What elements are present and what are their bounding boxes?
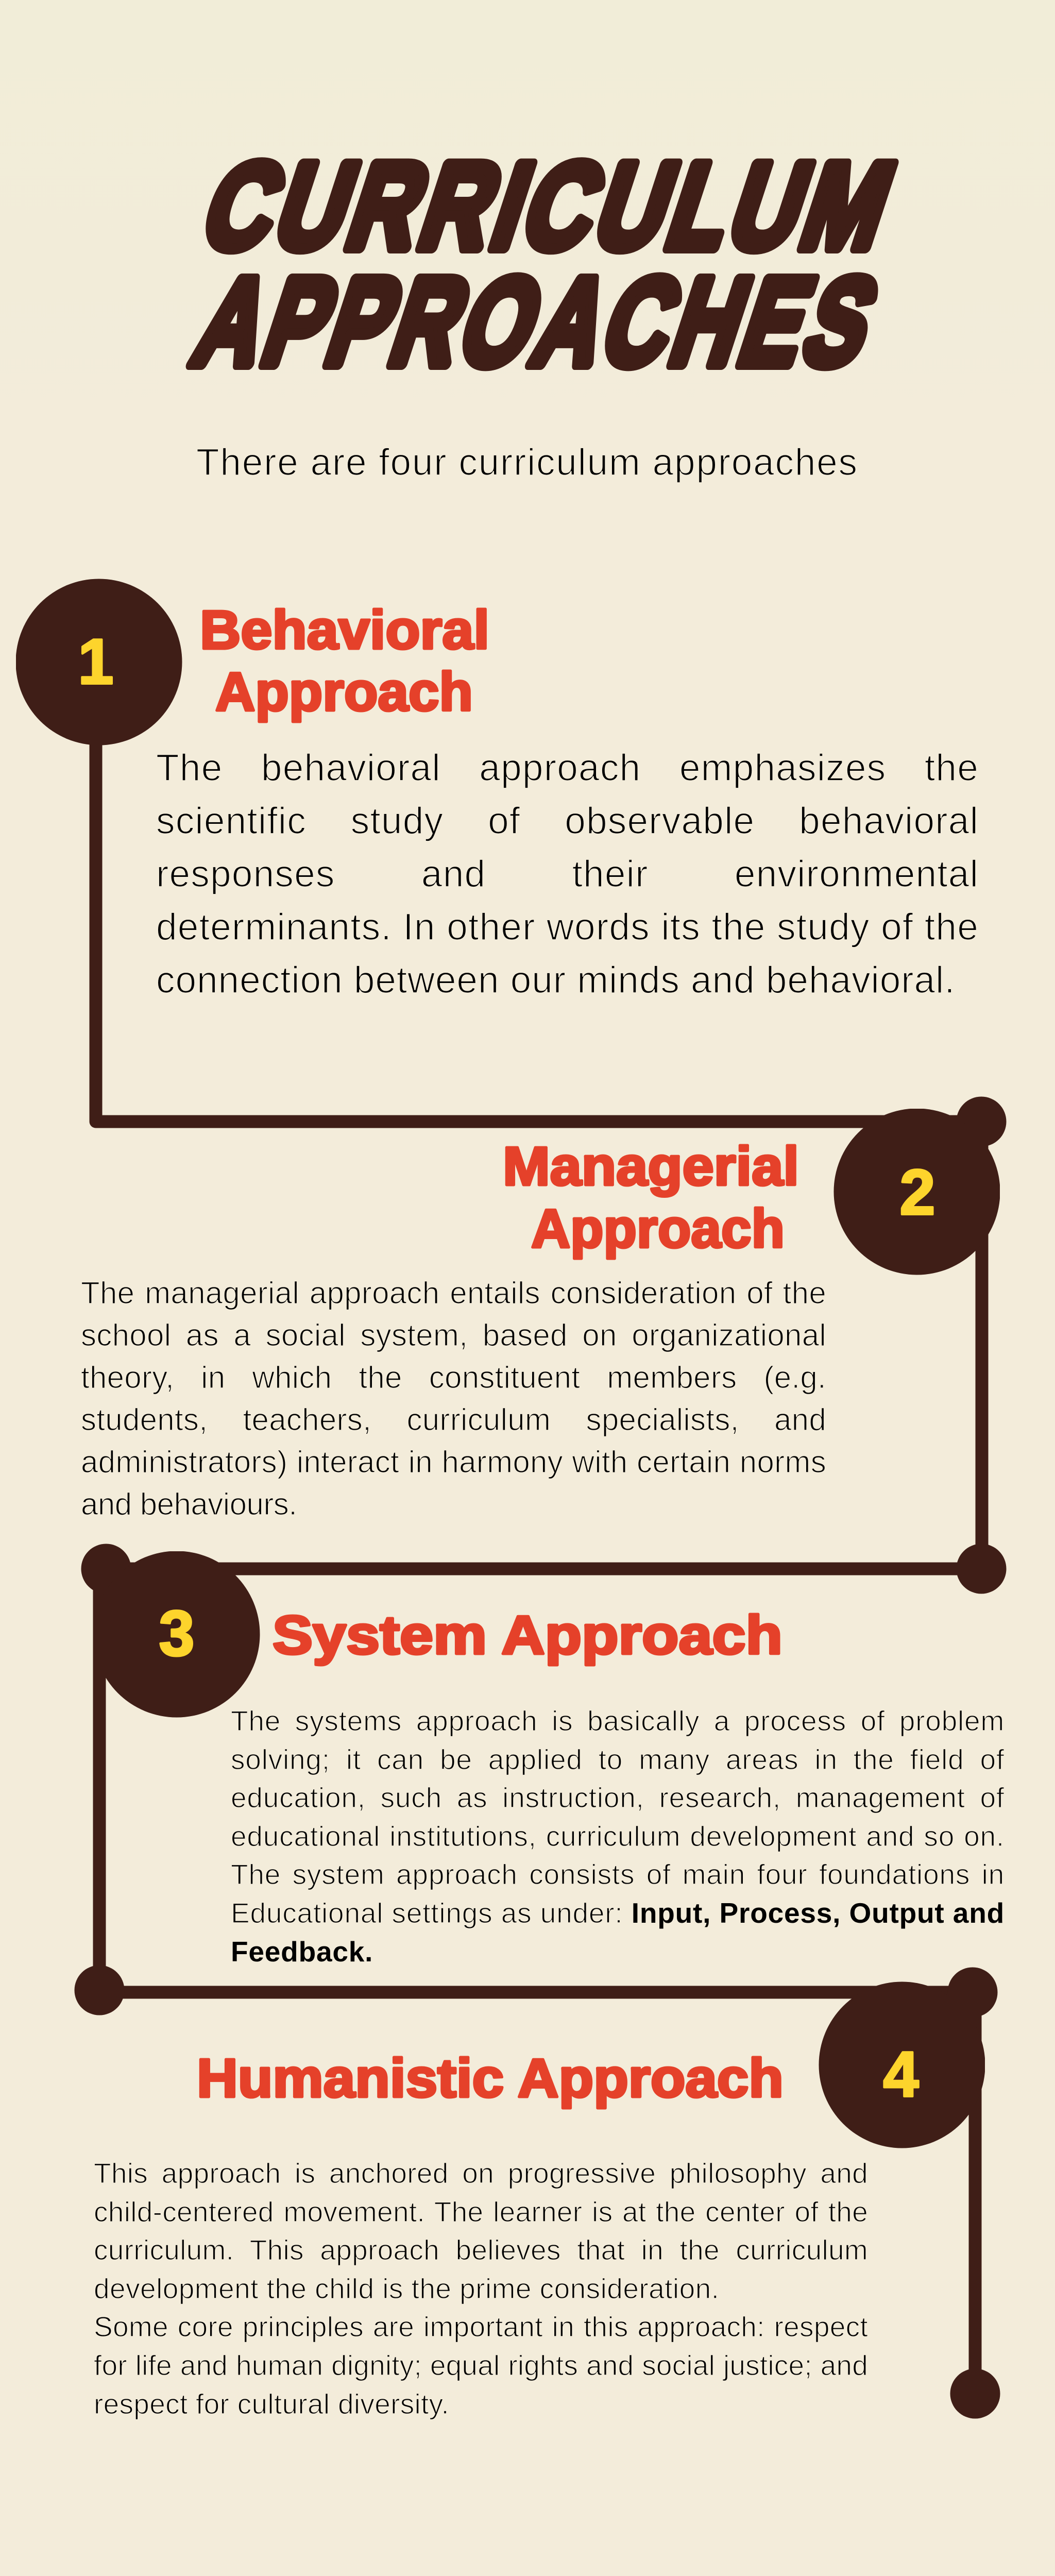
number badge 1 xyxy=(15,579,182,745)
number badge 3: 3 xyxy=(159,1598,194,1669)
connector: step 4 end xyxy=(968,1992,982,2394)
body text: system: solving; it can be applied to many areas in the field of xyxy=(231,1743,1005,1775)
connector: step 2 to step 3 xyxy=(106,1122,982,1569)
heading: behavioral approach xyxy=(200,600,489,722)
body text: system: The systems approach is basically a process of problem xyxy=(231,1705,1005,1737)
body text: behavioral: The behavioral approach emphasizes the xyxy=(156,747,979,789)
body text: managerial: theory, in which the constituent members (e.g. xyxy=(81,1360,826,1395)
body text: humanistic: Some core principles are important in this approach: respect xyxy=(94,2311,868,2343)
body text: system: education, such as instruction, research, management of xyxy=(231,1782,1005,1814)
body text: behavioral: responses and their environmental xyxy=(156,853,979,895)
body text: humanistic: This approach is anchored on progressive philosophy and xyxy=(94,2157,868,2189)
body text: behavioral: connection between our minds and behavioral. xyxy=(156,959,955,1001)
heading: behavioral approach: Approach xyxy=(215,662,473,722)
panel: behavioral approach xyxy=(16,579,979,1001)
body text: behavioral: determinants. In other words its the study of the xyxy=(156,906,979,948)
body text: behavioral xyxy=(156,747,979,1001)
body text: humanistic: development the child is the prime consideration. xyxy=(94,2273,719,2304)
body text: system xyxy=(231,1705,1005,1968)
heading: system approach: System Approach xyxy=(273,1605,782,1666)
body text: system: The system approach consists of main four foundations in xyxy=(231,1858,1005,1890)
number badge 4 xyxy=(819,1981,985,2148)
connector dots xyxy=(74,1096,1007,2418)
body text: humanistic xyxy=(94,2157,868,2420)
number badge 2: 2 xyxy=(900,1157,935,1228)
body text: humanistic: child-centered movement. The learner is at the center of the xyxy=(94,2196,868,2228)
body text: system: Feedback. xyxy=(231,1936,373,1968)
body text: humanistic: curriculum. This approach believes that in the curriculum xyxy=(94,2234,868,2266)
number badge 2 xyxy=(833,1109,1000,1275)
body text: managerial xyxy=(81,1276,826,1521)
panel: system approach xyxy=(106,1551,1005,1968)
body text: humanistic: for life and human dignity; equal rights and social justice; and xyxy=(94,2349,868,2381)
number badge 4: 4 xyxy=(883,2039,919,2110)
body text: humanistic: respect for cultural diversity. xyxy=(94,2388,449,2420)
number badge 1: 1 xyxy=(78,626,113,698)
body text: system: Educational settings as under: Input, Process, Output and xyxy=(231,1897,1005,1929)
body text: managerial: The managerial approach entails consideration of the xyxy=(81,1276,826,1310)
heading: humanistic approach: Humanistic Approach xyxy=(197,2048,784,2109)
subtitle: There are four curriculum approaches xyxy=(196,442,857,483)
number badge 3 xyxy=(94,1551,260,1718)
heading: behavioral approach: Behavioral xyxy=(200,600,489,660)
body text: behavioral: scientific study of observable behavioral xyxy=(156,800,979,842)
heading: managerial approach: Approach xyxy=(531,1198,785,1259)
body text: managerial: school as a social system, based on organizational xyxy=(81,1318,826,1352)
heading: managerial approach: Managerial xyxy=(503,1136,799,1197)
panel: managerial approach xyxy=(81,1109,1000,1521)
connector: step 3 to step 4 xyxy=(99,1569,973,1992)
body text: system: educational institutions, curriculum development and so on. xyxy=(231,1820,1005,1852)
heading: managerial approach xyxy=(503,1136,799,1259)
body text: managerial: administrators) interact in harmony with certain norms xyxy=(81,1445,826,1479)
title xyxy=(179,139,913,391)
body text: managerial: students, teachers, curriculum specialists, and xyxy=(81,1402,826,1437)
panel: humanistic approach xyxy=(94,1981,985,2420)
connector: step 1 to step 2 xyxy=(96,662,981,1122)
body text: managerial: and behaviours. xyxy=(81,1487,297,1521)
